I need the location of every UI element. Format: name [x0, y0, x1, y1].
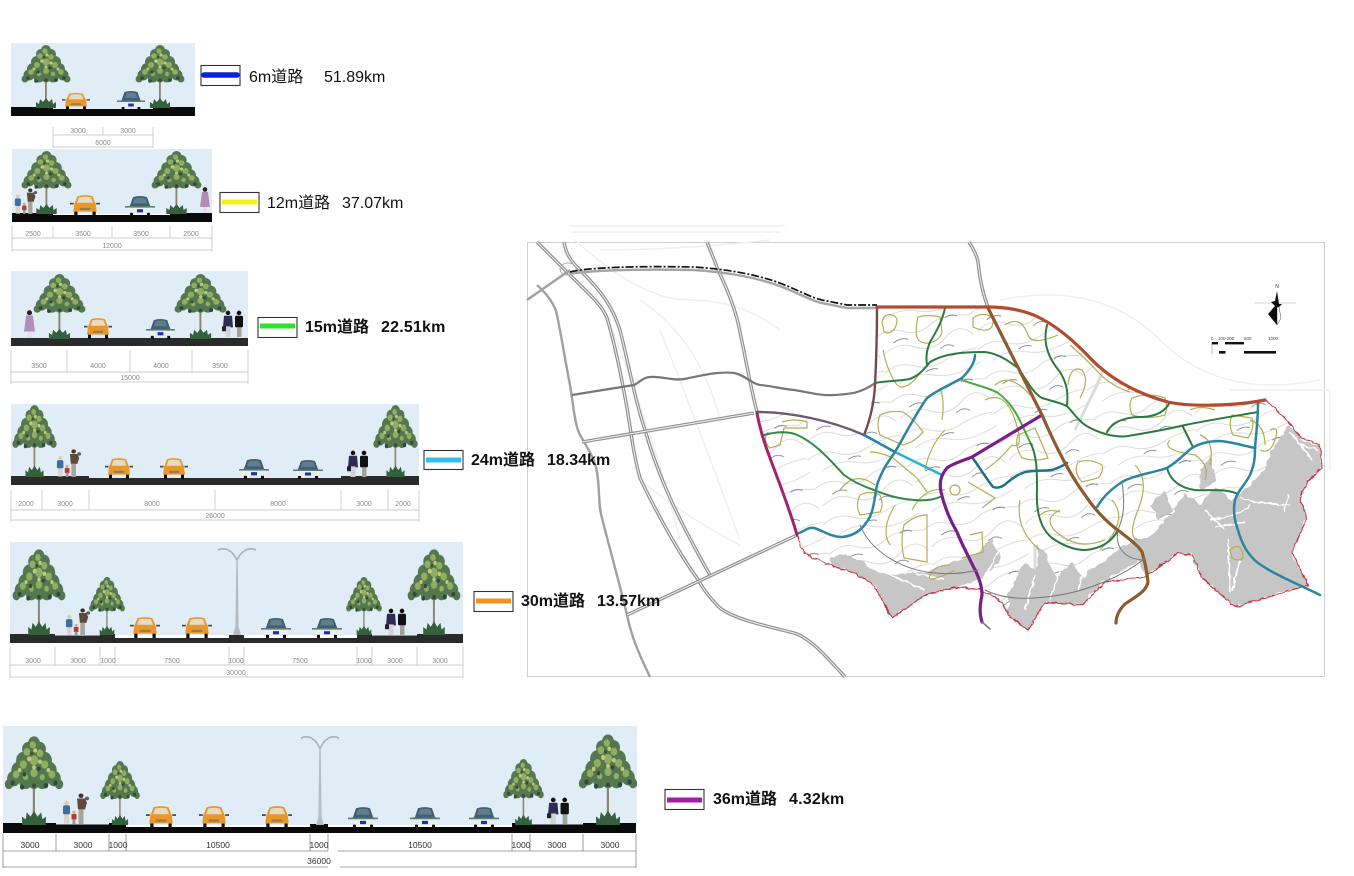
- legend: 30m road: [474, 591, 660, 612]
- cars: [62, 91, 145, 110]
- scale bar: 500: [1244, 336, 1252, 341]
- sky panel: [11, 271, 248, 339]
- north arrow: [1254, 284, 1296, 325]
- dimensions: 1000: [228, 658, 244, 665]
- dimensions: 3000: [387, 658, 403, 665]
- north arrow: N: [1275, 284, 1279, 290]
- sky panel: [11, 404, 419, 479]
- dimensions: 3500: [133, 231, 149, 238]
- dimensions: 26000: [205, 513, 225, 520]
- dimensions: 3000: [432, 658, 448, 665]
- gray ring path: [860, 482, 1146, 598]
- scale bar: [1211, 336, 1279, 354]
- dimensions: 3000: [120, 128, 136, 135]
- road surface: [11, 338, 248, 346]
- dimensions: 36000: [307, 856, 331, 866]
- dimensions: 15000: [120, 375, 140, 382]
- scale bar: 100 200: [1218, 336, 1235, 341]
- dimensions: 8000: [270, 501, 286, 508]
- legend: 30m road: 13.57km: [597, 593, 660, 610]
- road surface: [11, 107, 195, 116]
- sky panel: [10, 542, 463, 635]
- dimensions: 3500: [212, 363, 228, 370]
- dimensions: 1000: [109, 840, 128, 850]
- cars: [84, 318, 175, 339]
- map frame: [528, 242, 1324, 676]
- dark red western road: [864, 308, 877, 435]
- dimensions: 3500: [75, 231, 91, 238]
- legend: 24m road: 18.34km: [547, 452, 610, 469]
- dimensions: 4000: [90, 363, 106, 370]
- sky panel: [12, 149, 212, 214]
- purple-gray western arc road: [757, 412, 864, 435]
- legend: 36m road: 36m道路: [713, 789, 777, 808]
- legend: 15m road: 15m道路: [305, 317, 369, 336]
- gray tail: [982, 622, 990, 629]
- road network map: [527, 226, 1330, 677]
- legend: 12m road: 37.07km: [342, 195, 403, 212]
- cars: [130, 617, 342, 638]
- section: 36m road: [3, 726, 637, 868]
- legend: 24m road: 24m道路: [471, 450, 535, 469]
- legend: 12m road: [220, 192, 403, 212]
- sky panel: [11, 43, 195, 109]
- dimensions: [53, 127, 153, 148]
- dimensions: 2000: [395, 501, 411, 508]
- legend: 36m road: 4.32km: [789, 791, 844, 808]
- trees: [5, 734, 637, 825]
- residential parcel outlines: [765, 314, 1277, 579]
- pedestrians: [63, 793, 569, 824]
- brown 30m road: [988, 308, 1148, 623]
- road surface: [12, 213, 212, 222]
- road surface: [3, 823, 636, 833]
- trees: [22, 151, 201, 214]
- dimensions: 10500: [206, 840, 230, 850]
- site boundary: [797, 400, 1322, 630]
- road surface: [10, 634, 463, 643]
- dimensions: 3000: [601, 840, 620, 850]
- dimensions: 3000: [57, 501, 73, 508]
- dimensions: 3000: [21, 840, 40, 850]
- legend: 6m road: 51.89km: [324, 69, 385, 86]
- cars: [105, 458, 323, 479]
- external gray roads: [527, 242, 988, 677]
- magenta 36m road west: [757, 413, 797, 535]
- trees: [13, 549, 460, 635]
- pedestrians: [24, 310, 243, 338]
- trees: [22, 45, 184, 108]
- dimensions: 1000: [512, 840, 531, 850]
- dimensions: 3500: [31, 363, 47, 370]
- pedestrians: [15, 187, 210, 214]
- dimensions: 1000: [310, 840, 329, 850]
- sky panel: [3, 726, 637, 825]
- legend: 15m road: 22.51km: [381, 319, 446, 336]
- dimensions: 8000: [144, 501, 160, 508]
- legend: 30m road: 30m道路: [521, 591, 585, 610]
- legend: 15m road: [258, 317, 446, 338]
- teal overlap section: [864, 435, 895, 452]
- dimensions: [11, 490, 419, 522]
- dimensions: 30000: [226, 670, 246, 677]
- legend: 36m road: [665, 789, 844, 810]
- legend: 6m road: 6m道路: [249, 68, 303, 86]
- section: 6m road: [11, 43, 195, 148]
- dimensions: 6000: [95, 140, 111, 147]
- dimensions: 3000: [74, 840, 93, 850]
- red-brown 30m road north: [877, 307, 1265, 405]
- faint surrounding terrain: [570, 226, 1330, 545]
- expressway dashed line: [570, 267, 877, 305]
- gray hill areas: [830, 425, 1321, 630]
- scale bar: 0: [1211, 336, 1214, 341]
- dimensions: 1000: [356, 658, 372, 665]
- teal main roads: [799, 355, 1320, 595]
- section: 24m road: [11, 404, 419, 522]
- dimensions: 3000: [548, 840, 567, 850]
- dimensions: 3000: [70, 658, 86, 665]
- dimensions: [11, 350, 248, 384]
- dimensions: [12, 226, 212, 252]
- dimensions: 3000: [70, 128, 86, 135]
- section: 12m road: [12, 149, 212, 252]
- pedestrians: [57, 449, 368, 477]
- dimensions: 2500: [183, 231, 199, 238]
- street lamp: [301, 737, 339, 825]
- section: 30m road: [10, 542, 463, 678]
- dimensions: 3000: [25, 658, 41, 665]
- dimensions: 3000: [356, 501, 372, 508]
- dimensions: 2000: [18, 501, 34, 508]
- contour texture: [760, 308, 1322, 616]
- legend: 6m road: [201, 66, 385, 86]
- dark green collector roads: [764, 308, 1258, 550]
- white valley fingers: [880, 432, 1318, 610]
- cars: [146, 806, 499, 828]
- trees: [34, 274, 226, 339]
- legend: 12m road: 12m道路: [267, 194, 330, 212]
- section: 15m road: [11, 271, 248, 384]
- cyan 24m road: [864, 435, 942, 475]
- dimensions: 1000: [100, 658, 116, 665]
- street lamp: [218, 549, 256, 635]
- cars: [70, 195, 155, 216]
- scale bar: 1000: [1268, 336, 1279, 341]
- dimensions: 7500: [164, 658, 180, 665]
- purple 36m road: [940, 415, 1042, 622]
- dimensions: 10500: [408, 840, 432, 850]
- dimensions: 2500: [25, 231, 41, 238]
- dimensions: 12000: [102, 243, 122, 250]
- pedestrians: [66, 608, 406, 636]
- dimensions: [10, 647, 463, 678]
- trees: [12, 405, 418, 477]
- dimensions: 4000: [153, 363, 169, 370]
- road surface: [11, 476, 419, 485]
- legend: 24m road: [424, 450, 610, 470]
- dimensions: [3, 834, 636, 868]
- dimensions: 7500: [292, 658, 308, 665]
